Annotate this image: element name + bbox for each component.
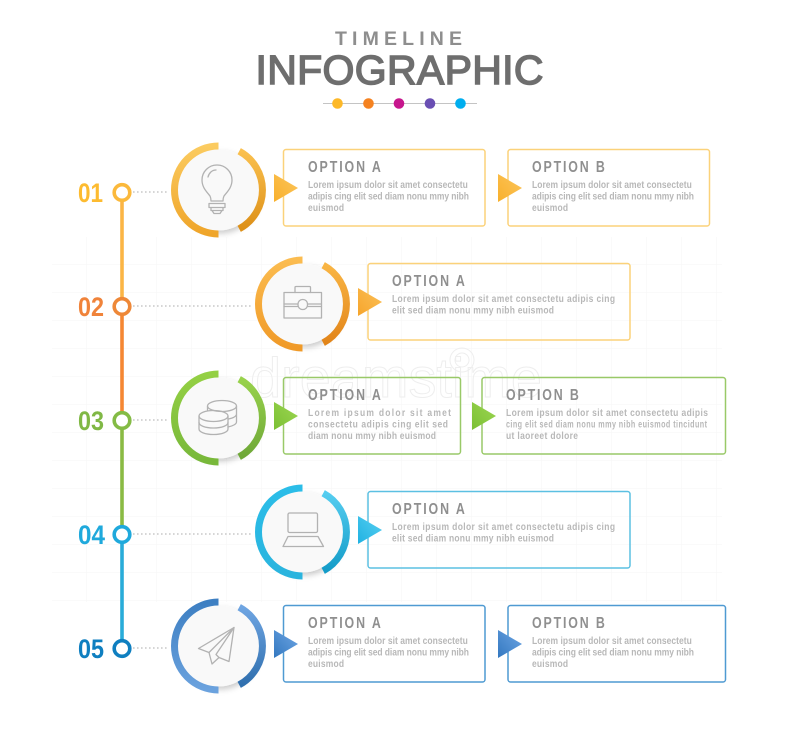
- panel: 03 option A: consectetu adipis cing elit sed: [308, 419, 448, 430]
- ring circle 03: [174, 374, 262, 462]
- icon: laptop: [283, 513, 324, 546]
- number 04: 04: [78, 520, 105, 550]
- heading: INFOGRAPHIC: INFOGRAPHIC: [256, 47, 544, 93]
- colored dots divider: [323, 98, 477, 109]
- arrow 2A: [358, 288, 382, 316]
- timeline vertical line: [120, 200, 124, 640]
- dotted connector 03: [133, 419, 169, 421]
- number 02: 02: [78, 292, 104, 322]
- panel: 02 option A: elit sed diam nonu mmy nibh euismod: [392, 305, 554, 316]
- panel: 05 option B: OPTION B: [532, 614, 605, 631]
- arrow 4A: [358, 516, 382, 544]
- panel: 01 option A: Lorem ipsum dolor sit amet consectetu: [308, 179, 468, 190]
- panel: 01 option B: OPTION B: [532, 158, 605, 175]
- panel: 03 option B: OPTION B: [506, 386, 579, 403]
- panel: 04 option A: elit sed diam nonu mmy nibh euismod: [392, 533, 554, 544]
- panel: 01 option A: adipis cing elit sed diam nonu mmy nibh: [308, 191, 469, 202]
- panel: 01 option B: Lorem ipsum dolor sit amet consectetu: [532, 179, 692, 190]
- panel: 05 option B: [508, 606, 726, 682]
- timeline node 02: [114, 299, 130, 314]
- panel: 05 option A: Lorem ipsum dolor sit amet consectetu: [308, 635, 468, 646]
- timeline node 04: [114, 527, 130, 542]
- panel: 03 option A: Lorem ipsum dolor sit amet: [308, 407, 451, 418]
- row 2: [78, 260, 630, 348]
- ring circle 02: [258, 260, 346, 348]
- panel: 03 option A: diam nonu mmy nibh euismod: [308, 430, 436, 441]
- dotted connector 02: [133, 305, 253, 307]
- panel: 03 option A: [284, 378, 460, 454]
- panel: 02 option A: Lorem ipsum dolor sit amet consectetu adipis cing: [392, 293, 615, 304]
- timeline node 03: [114, 413, 130, 428]
- number 05: 05: [78, 634, 104, 664]
- row 5: [78, 602, 726, 690]
- panel: 02 option A: OPTION A: [392, 272, 465, 289]
- icon: light bulb: [202, 165, 232, 214]
- dotted connector 01: [133, 191, 169, 193]
- ring circle 01: [174, 146, 262, 234]
- number 03: 03: [78, 406, 104, 436]
- heading: TIMELINE: TIMELINE: [335, 28, 462, 50]
- icon: paper plane: [198, 628, 234, 664]
- arrow 5B: [498, 630, 522, 658]
- panel: 05 option A: [284, 606, 485, 682]
- panel: 01 option A: OPTION A: [308, 158, 381, 175]
- panel: 04 option A: OPTION A: [392, 500, 465, 517]
- icon: coins: [199, 400, 236, 434]
- panel: 05 option B: euismod: [532, 658, 568, 669]
- text: dreamstime: [250, 346, 542, 409]
- panel: 03 option B: cing elit sed diam nonu mmy nibh euismod tincidunt: [506, 418, 707, 430]
- panel: 02 option A: [368, 264, 630, 340]
- arrow 1B: [498, 174, 522, 202]
- panel: 01 option A: euismod: [308, 202, 344, 213]
- ring circle 04: [258, 488, 346, 576]
- timeline node 05: [114, 641, 130, 656]
- panel: 05 option A: OPTION A: [308, 614, 381, 631]
- title: Timeline Infographic: [256, 28, 544, 109]
- arrow 1A: [274, 174, 298, 202]
- panel: 01 option B: euismod: [532, 202, 568, 213]
- panel: 05 option B: adipis cing elit sed diam nonu mmy nibh: [532, 647, 694, 658]
- panel: 03 option B: [482, 378, 726, 454]
- panel: 04 option A: [368, 492, 630, 568]
- row 4: [78, 488, 630, 576]
- number 01: 01: [78, 178, 103, 208]
- panel: 05 option A: euismod: [308, 658, 344, 669]
- panel: 03 option B: Lorem ipsum dolor sit amet consectetu adipis: [506, 407, 708, 418]
- panel: 05 option A: adipis cing elit sed diam nonu mmy nibh: [308, 647, 469, 658]
- panel: 04 option A: Lorem ipsum dolor sit amet consectetu adipis cing: [392, 521, 615, 532]
- dotted connector 05: [133, 647, 169, 649]
- dotted connector 04: [133, 533, 253, 535]
- panel: 05 option B: Lorem ipsum dolor sit amet consectetu: [532, 635, 692, 646]
- row 1: [78, 146, 710, 234]
- panel: 01 option B: [508, 150, 710, 226]
- panel: 01 option A: [284, 150, 485, 226]
- arrow 5A: [274, 630, 298, 658]
- ring circle 05: [174, 602, 262, 690]
- panel: 01 option B: adipis cing elit sed diam nonu mmy nibh: [532, 191, 694, 202]
- arrow 3B: [472, 402, 496, 430]
- row 3: [78, 374, 726, 462]
- timeline node 01: [114, 185, 130, 200]
- arrow 3A: [274, 402, 298, 430]
- panel: 03 option B: ut laoreet dolore: [506, 430, 578, 441]
- icon: briefcase: [284, 286, 322, 318]
- panel: 03 option A: OPTION A: [308, 386, 381, 403]
